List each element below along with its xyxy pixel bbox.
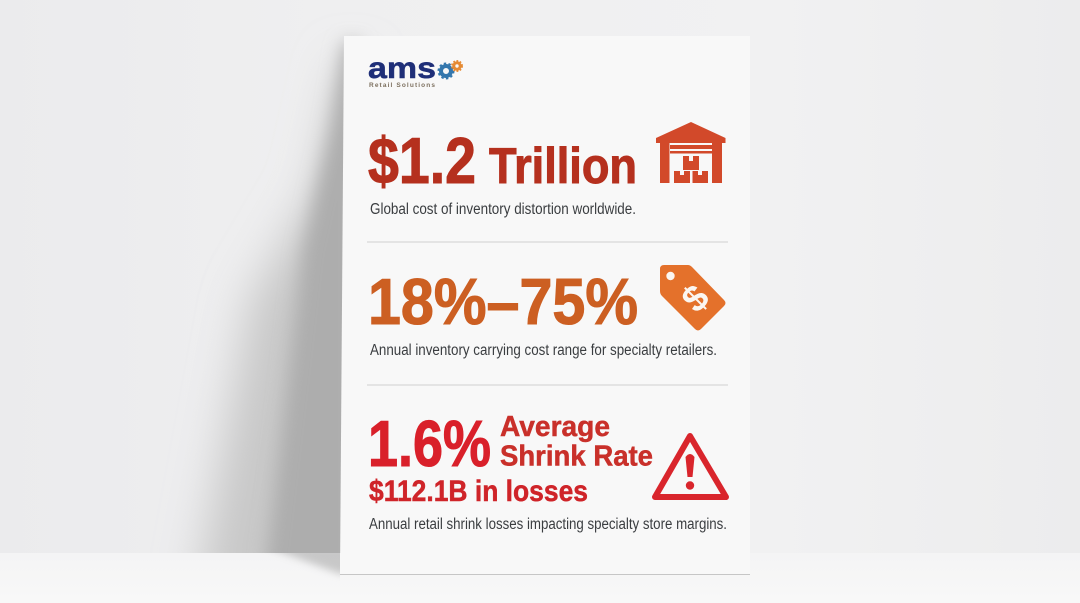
icon: warehouse <box>656 122 726 183</box>
icon: price tag <box>660 265 726 330</box>
icon: gears <box>438 61 462 78</box>
icon: warning triangle <box>655 436 726 497</box>
poster <box>340 36 750 574</box>
stat 2 description: Annual inventory carrying cost range for specialty retailers. <box>370 342 717 359</box>
poster shadow on wall <box>195 42 360 600</box>
stat 3 heading <box>368 407 653 508</box>
stat 2 heading: 18%–75% <box>368 265 638 338</box>
logo: Retail Solutions <box>369 82 435 89</box>
stat 3 description: Annual retail shrink losses impacting specialty store margins. <box>369 516 727 533</box>
stat 1 heading: Trillion <box>489 138 637 194</box>
stat 3 heading: Average <box>500 411 610 443</box>
stat 3 heading: 1.6% <box>368 407 491 480</box>
stat 1 description: Global cost of inventory distortion worldwide. <box>370 201 636 218</box>
logo: ams <box>368 52 436 85</box>
logo <box>368 52 462 89</box>
stat 3 heading: Shrink Rate <box>500 440 653 472</box>
floor <box>0 553 1080 603</box>
stat 3 heading: $112.1B in losses <box>369 475 588 508</box>
poster shadow on floor <box>275 553 340 577</box>
stat 1 heading <box>368 124 637 197</box>
icon: price tag: $ <box>674 276 717 320</box>
stat 1 heading: $1.2 <box>368 124 476 197</box>
